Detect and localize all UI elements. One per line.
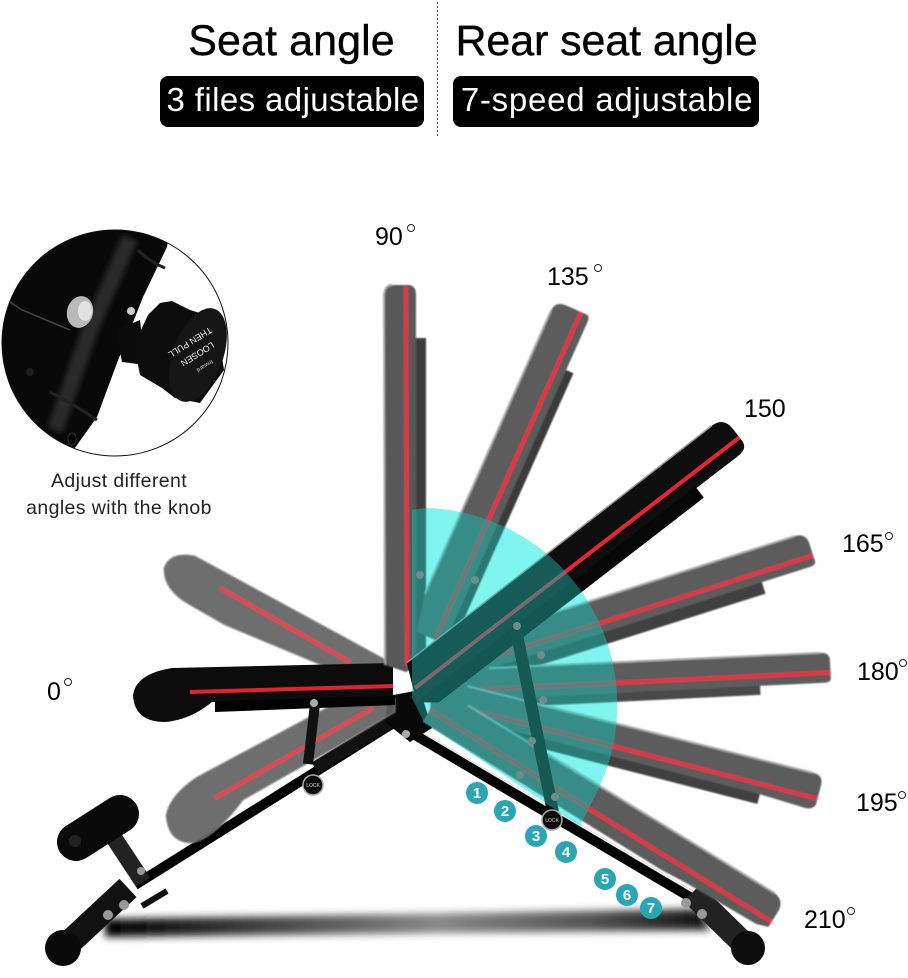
marker 3: 3: [532, 828, 540, 845]
marker 5: [594, 868, 616, 890]
teal strut: [516, 630, 553, 812]
marker 6: 6: [623, 887, 631, 904]
icon: hex bolt: [63, 293, 97, 331]
marker 7: 7: [647, 900, 655, 917]
caption: knob: [26, 470, 212, 519]
angle labels: 165: [842, 530, 884, 558]
angle labels: 0: [47, 678, 61, 706]
icon: adjustment knob: Inward: [195, 358, 214, 372]
adjustment lock knobs: LOCK: [306, 783, 320, 789]
pad: 180 degree back: [429, 650, 831, 711]
divider between headings: [436, 2, 438, 136]
floor shadow: [105, 909, 710, 937]
pad: grey seat lowered: [166, 698, 395, 843]
pad: 210 degree back: [423, 688, 785, 934]
badge: 7-speed adjustable: 7-speed adjustable: [461, 81, 753, 118]
badge: 7-speed adjustable: [453, 76, 759, 127]
caption: knob: Adjust different: [51, 470, 187, 492]
seat bolts: [416, 571, 559, 801]
title: rear seat angle: Rear seat angle: [455, 17, 758, 65]
angle labels: 150: [744, 395, 786, 423]
marker 4: [555, 841, 577, 863]
position markers 1 to 7: [466, 782, 662, 919]
pad: 195 degree back: [428, 677, 823, 818]
angle labels: 195: [856, 789, 898, 817]
marker 7: [640, 897, 662, 919]
angle labels: 90: [375, 223, 403, 251]
marker 1: 1: [473, 785, 481, 802]
adjustment lock knobs: LOCK: [545, 818, 559, 824]
adjustment lock knobs: [303, 775, 562, 830]
marker 6: [616, 884, 638, 906]
angle labels: 210: [804, 906, 846, 934]
marker 2: [494, 800, 516, 822]
icon: adjustment knob: LOOSEN: [179, 340, 216, 368]
icon: adjustment knob: THEN PULL: [166, 325, 214, 360]
pad: grey seat raised: [164, 555, 390, 675]
icon: adjustment knob: [116, 300, 238, 410]
caption: knob: angles with the knob: [26, 497, 212, 519]
badge: 3 files adjustable: 3 files adjustable: [166, 81, 420, 118]
marker 3: [525, 825, 547, 847]
badge: 3 files adjustable: [160, 76, 424, 127]
title: seat angle: Seat angle: [188, 17, 395, 65]
pad: black seat 0 degrees: [133, 663, 395, 764]
marker 5: 5: [601, 871, 609, 888]
pad: 165 degree back: [423, 533, 820, 698]
inset: knob close-up: [0, 228, 238, 460]
marker 2: 2: [501, 803, 509, 820]
teal angle sector: [412, 508, 617, 826]
pad: black 150 degree back: [393, 417, 755, 713]
marker 4: 4: [562, 844, 571, 861]
angle labels: 180: [857, 658, 899, 686]
marker 1: [466, 782, 488, 804]
pad: 90 degree back: [384, 285, 426, 672]
angle labels: [47, 223, 906, 934]
pad: 135 degree back: [409, 301, 597, 647]
frame: base rails and feet: [45, 690, 765, 966]
angle labels: 135: [547, 263, 589, 291]
